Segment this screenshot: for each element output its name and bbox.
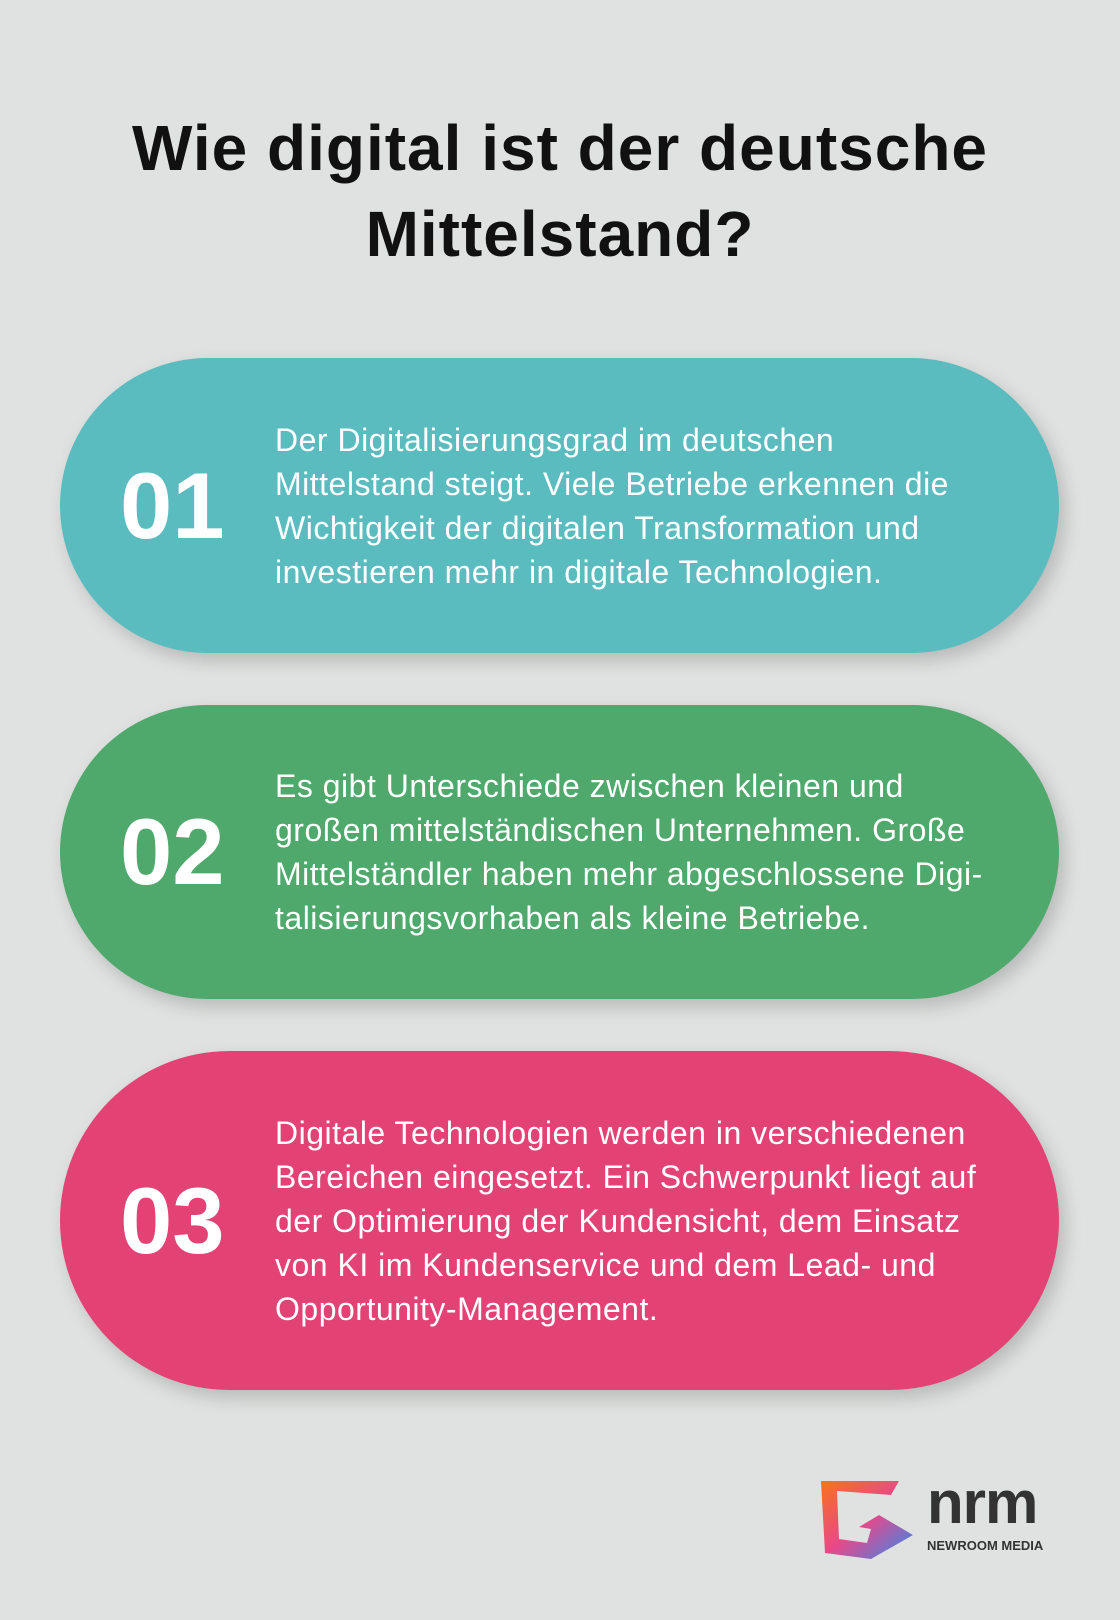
text 03: Bereichen eingesetzt. Ein Schwerpunkt liegt auf	[275, 1158, 976, 1194]
text 03: Opportunity-Management.	[275, 1290, 658, 1326]
text 03: Digitale Technologien werden in verschiedenen	[275, 1114, 966, 1150]
text 02: großen mittelständischen Unternehmen. Große	[275, 812, 965, 848]
text 02	[275, 768, 983, 936]
text 01: Mittelstand steigt. Viele Betriebe erkennen die	[275, 466, 949, 502]
number 01: 01	[120, 452, 225, 558]
text 03: von KI im Kundenservice und dem Lead- und	[275, 1246, 936, 1282]
text 01	[275, 422, 949, 590]
text 02: Es gibt Unterschiede zwischen kleinen und	[275, 768, 904, 804]
text 03	[275, 1114, 976, 1326]
text 02: talisierungsvorhaben als kleine Betriebe.	[275, 900, 870, 936]
text 01: investieren mehr in digitale Technologien.	[275, 554, 882, 590]
panel: 03	[60, 1051, 1059, 1390]
title: Wie digital ist der deutsche	[132, 112, 988, 184]
text 02: Mittelständler haben mehr abgeschlossene Digi-	[275, 856, 983, 892]
logo	[821, 1469, 1043, 1559]
text 01: Wichtigkeit der digitalen Transformation und	[275, 510, 920, 546]
title	[132, 112, 988, 270]
icon: logo mark	[821, 1481, 913, 1559]
panel: 01	[60, 358, 1059, 653]
logo: NEWROOM MEDIA	[927, 1538, 1043, 1553]
text 01: Der Digitalisierungsgrad im deutschen	[275, 422, 834, 458]
text 03: der Optimierung der Kundensicht, dem Einsatz	[275, 1202, 960, 1238]
number 03: 03	[120, 1168, 225, 1272]
number 02: 02	[120, 799, 225, 904]
logo text: nrm	[927, 1469, 1037, 1536]
title: Mittelstand?	[366, 198, 754, 270]
panel: 02	[60, 705, 1059, 999]
